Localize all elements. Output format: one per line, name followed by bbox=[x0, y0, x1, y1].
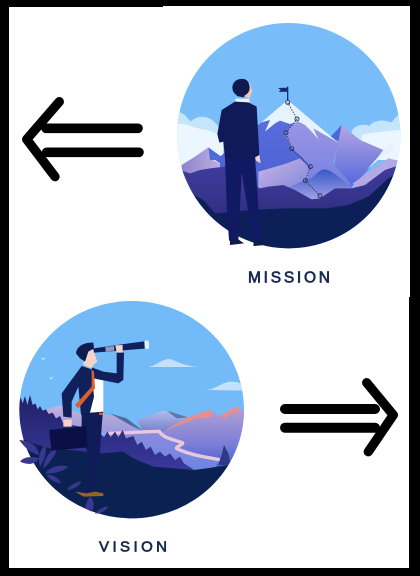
dark foreground bbox=[194, 175, 394, 248]
blue dome hill bbox=[288, 169, 353, 200]
clouds bbox=[148, 359, 247, 391]
heading: vision: VISION bbox=[99, 539, 167, 556]
briefcase bbox=[49, 426, 88, 451]
center mountain shadow bbox=[167, 411, 188, 418]
panel: vision illustration bbox=[17, 298, 250, 523]
right snow bbox=[367, 156, 379, 170]
dark hill bbox=[24, 439, 228, 518]
front clouds bbox=[177, 124, 403, 170]
pink ridge highlights bbox=[165, 407, 241, 430]
summit flag bbox=[278, 87, 288, 101]
valley bbox=[100, 432, 220, 470]
arrow: right double arrow bbox=[285, 383, 393, 452]
arrow: left double arrow bbox=[27, 102, 139, 177]
right mountains bbox=[165, 407, 247, 477]
heading: mission: MISSION bbox=[248, 270, 330, 286]
businessman with telescope bbox=[62, 341, 149, 497]
lower slope bbox=[258, 158, 310, 192]
snow cap bbox=[261, 100, 338, 143]
back clouds bbox=[178, 112, 400, 141]
forest bbox=[18, 395, 193, 490]
foliage bbox=[19, 440, 108, 513]
left far mountain bbox=[182, 148, 220, 180]
distant left mountain bbox=[45, 405, 144, 433]
small blue peak bbox=[331, 125, 342, 142]
main mountain left face bbox=[220, 100, 310, 190]
left mountain blue face bbox=[208, 148, 220, 164]
birds bbox=[41, 357, 53, 379]
pine tree bbox=[218, 445, 231, 465]
man from behind bbox=[217, 79, 269, 246]
river bbox=[110, 431, 218, 459]
far right slope bbox=[353, 158, 398, 190]
main mountain right face bbox=[285, 104, 352, 186]
panel: mission illustration bbox=[177, 23, 400, 248]
sky bbox=[177, 23, 400, 248]
climbing route bbox=[284, 100, 322, 198]
purple ridge bbox=[180, 165, 400, 233]
left mountain ridge shadow bbox=[110, 414, 142, 430]
right mountain bbox=[330, 125, 383, 187]
sky bbox=[17, 298, 250, 522]
center mountain bbox=[137, 411, 188, 432]
